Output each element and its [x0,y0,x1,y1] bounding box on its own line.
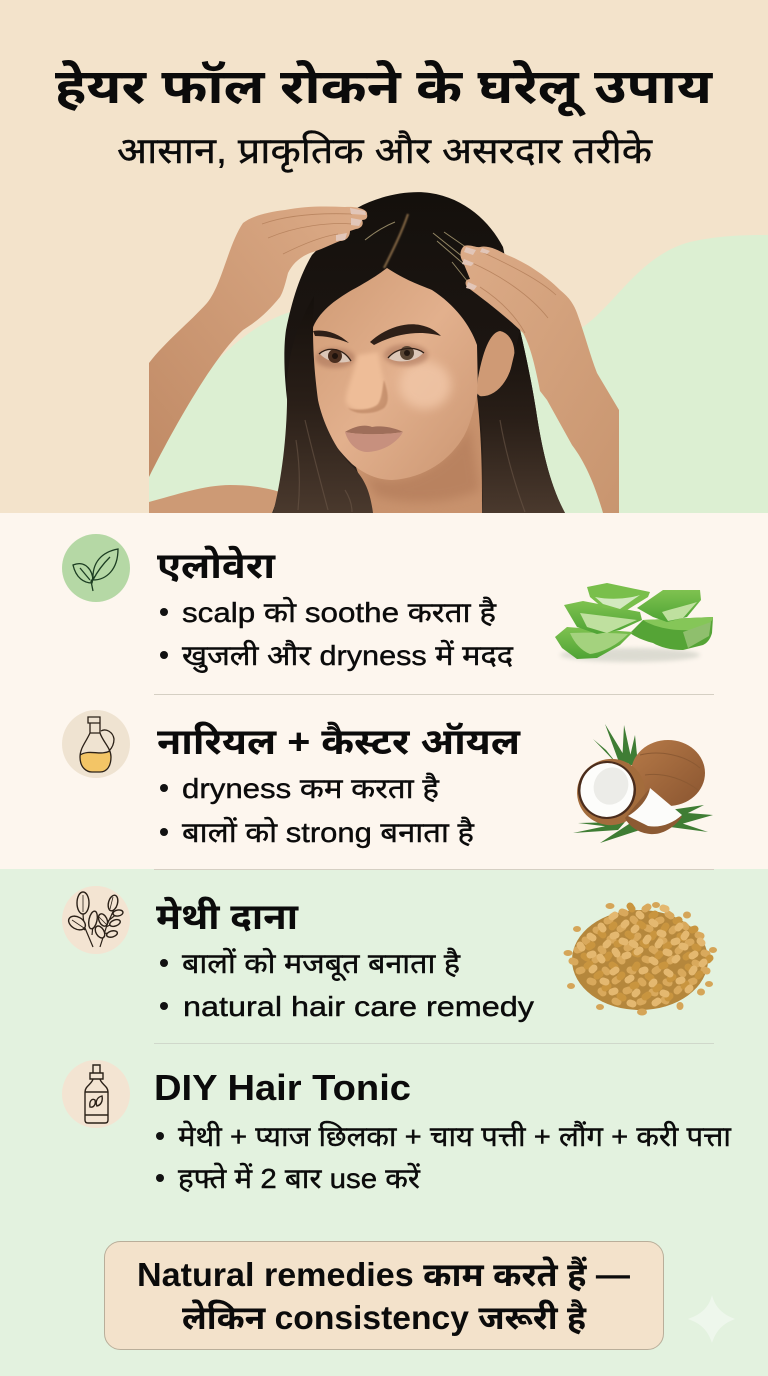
background: cream remedy section [0,513,768,869]
neck shadow [365,425,480,502]
background: beige header [0,0,768,514]
face [312,268,478,480]
hair highlights [296,420,525,512]
callout [104,1242,664,1350]
background: green wave [149,235,768,513]
image: aloe pieces [555,583,713,662]
divider [154,869,714,870]
cheek highlight [399,361,451,409]
right eye [388,349,423,361]
callout: लेकिन consistency जरूरी है [182,1298,587,1336]
right fingernails [462,247,490,290]
icon: herb sprigs [62,886,130,954]
icon: dropper bottle [62,1060,130,1128]
heading: DIY Hair Tonic [154,1067,411,1108]
left fingernails [336,208,366,241]
icon: leaf [62,534,130,602]
bullets: बालों को मजबूत बनाता है [182,947,461,981]
eye socket shading [315,344,428,368]
bullets: बालों को strong बनाता है [182,816,475,848]
stray seeds [564,902,717,1016]
bullets [160,947,534,1022]
scalp highlight strokes [365,222,470,282]
bullets: हफ्ते में 2 बार use करें [178,1162,421,1194]
callout: Natural remedies काम करते हैं — [137,1255,630,1293]
title: हेयर फॉल रोकने के घरेलू उपाय [55,59,714,117]
remedy 2: coconut and castor oil [62,710,713,848]
left eye [320,350,351,363]
left arm and hand [149,206,367,477]
neck and chest [350,395,482,513]
heading: मेथी दाना [156,895,299,937]
image: fenugreek seed pile [564,902,717,1016]
bullets [156,1120,732,1194]
bullets: dryness कम करता है [182,772,440,804]
bullets: scalp को soothe करता है [182,596,497,628]
right hand finger creases [470,252,556,333]
remedy 4: DIY hair tonic [62,1060,732,1194]
remedy 1: aloe vera [62,534,713,673]
right eyebrow [370,324,441,345]
lips [345,426,403,434]
bullets [160,772,475,848]
left hand finger creases [262,214,352,254]
image: coconut [570,724,713,843]
icon: oil bottle [62,710,130,778]
illustration: woman touching scalp [149,192,619,513]
bullets [160,596,514,673]
subtitle: आसान, प्राकृतिक और असरदार तरीके [117,130,653,173]
hair parting [384,214,408,268]
heading: नारियल + कैस्टर ऑयल [157,720,522,762]
bullets: natural hair care remedy [183,991,534,1022]
bullets: खुजली और dryness में मदद [182,639,514,673]
sparkle [688,1295,735,1343]
left hair strand [273,296,373,513]
divider [154,694,714,695]
left shoulder [149,485,280,513]
right arm and hand [460,245,619,513]
nose shading [346,352,386,411]
remedy 3: fenugreek seeds [62,886,717,1022]
right hair strand [478,330,565,513]
divider [154,1043,714,1044]
left eyebrow [313,330,349,343]
bullets: मेथी + प्याज छिलका + चाय पत्ती + लौंग + करी पत्ता [178,1120,732,1152]
ear [477,331,514,397]
background: green remedy section [0,869,768,1376]
heading: एलोवेरा [157,544,277,586]
hair back [272,192,565,513]
